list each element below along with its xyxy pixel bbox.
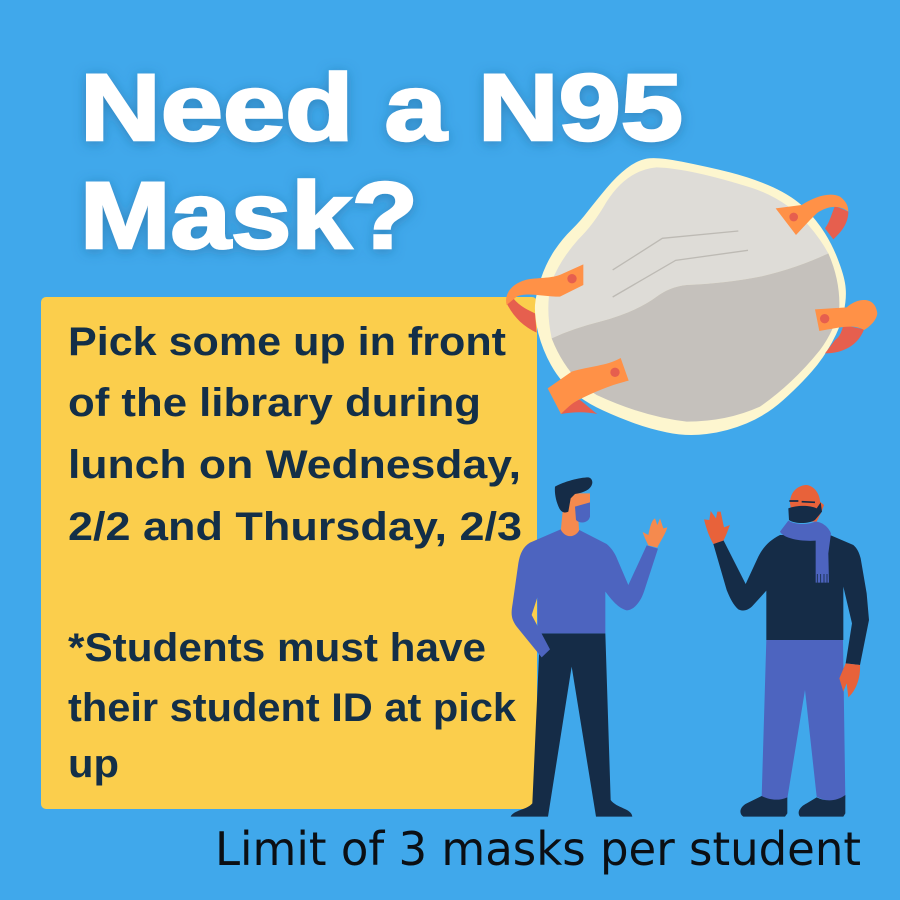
- scarf: [780, 521, 831, 583]
- sweater: [512, 529, 658, 657]
- text: student ID note: their student ID at pick: [68, 686, 517, 730]
- text: limit per student: Limit of 3 masks per student: [215, 822, 861, 876]
- head: [790, 485, 824, 522]
- text: pickup location and dates: lunch on Wednesday,: [68, 443, 521, 487]
- text: pickup location and dates: of the library during: [68, 381, 481, 425]
- hair: [555, 477, 592, 513]
- raised hand: [704, 511, 730, 544]
- illustration: man in navy sweater with scarf: [704, 485, 869, 817]
- text: pickup location and dates: 2/2 and Thursday, 2/3: [68, 505, 522, 549]
- text: student ID note: up: [68, 742, 119, 786]
- shoes: [740, 796, 787, 817]
- face mask: [788, 502, 822, 523]
- mask lower panel: [552, 253, 839, 422]
- icon: N95 mask: [506, 158, 877, 435]
- illustration: man in blue sweater: [511, 477, 667, 817]
- mask creases: [613, 231, 748, 297]
- raised hand: [643, 518, 667, 548]
- mask rim: [535, 158, 846, 435]
- title: Need a N95: [80, 55, 683, 161]
- trousers: [762, 640, 845, 801]
- brows: [789, 501, 815, 502]
- scarf fringe: [817, 574, 827, 583]
- strap: upper left: [506, 264, 583, 333]
- strap: right: [815, 300, 877, 353]
- lower hand: [839, 663, 860, 697]
- text: pickup location and dates: Pick some up in front: [68, 320, 506, 364]
- neck and face: [561, 493, 590, 537]
- sweater: [713, 535, 869, 665]
- mask upper panel: [548, 167, 828, 338]
- face mask: [575, 502, 590, 522]
- panel: pickup details: [41, 297, 537, 809]
- text: pickup location and dates: [68, 320, 522, 549]
- title: [80, 55, 683, 269]
- trousers: [511, 633, 632, 817]
- strap: lower left: [548, 358, 629, 414]
- text: student ID note: *Students must have: [68, 626, 486, 670]
- shoe right: [799, 795, 845, 817]
- text: student ID note: [68, 626, 517, 786]
- strap: upper right: [776, 195, 848, 239]
- title: Mask?: [80, 163, 418, 269]
